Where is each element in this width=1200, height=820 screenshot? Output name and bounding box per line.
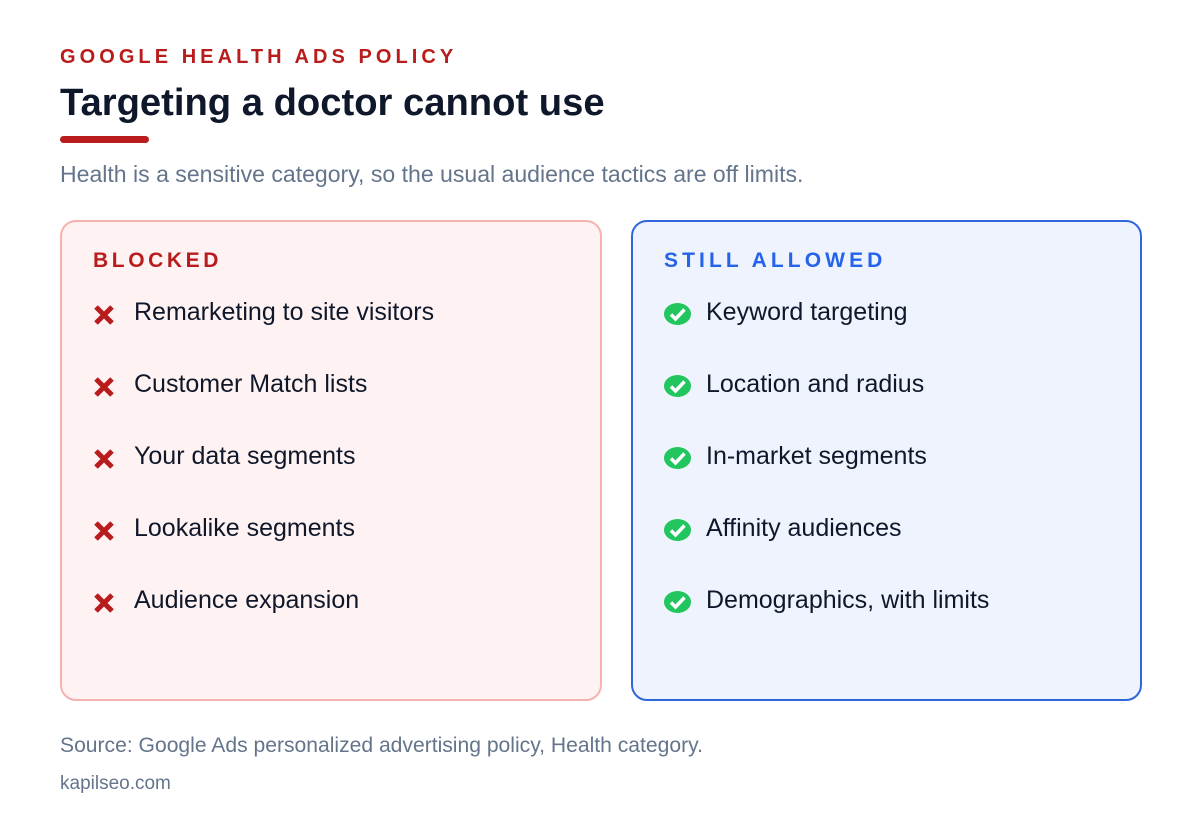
icon: check (664, 303, 691, 325)
site credit: kapilseo.com (60, 773, 171, 794)
item: customer match: Customer Match lists (134, 370, 367, 398)
item: remarketing: Remarketing to site visitors (134, 298, 434, 326)
item: lookalike: Lookalike segments (134, 514, 355, 542)
item: keyword: Keyword targeting (706, 298, 908, 326)
icon: cross (94, 449, 114, 469)
item: demographics: Demographics, with limits (706, 586, 989, 614)
eyebrow: GOOGLE HEALTH ADS POLICY (60, 46, 457, 68)
icon: check (664, 375, 691, 397)
item: data segments: Your data segments (134, 442, 355, 470)
subtitle: Health is a sensitive category, so the usual audience tactics are off limits. (60, 161, 803, 187)
icon: check (664, 519, 691, 541)
source note: Source: Google Ads personalized advertising policy, Health category. (60, 734, 703, 757)
item: location: Location and radius (706, 370, 924, 398)
icon: check (664, 591, 691, 613)
item: affinity: Affinity audiences (706, 514, 902, 542)
icon: cross (94, 593, 114, 613)
item: audience expansion: Audience expansion (134, 586, 359, 614)
title: Targeting a doctor cannot use (60, 81, 605, 124)
title accent bar (60, 136, 149, 143)
panel: blocked (60, 220, 602, 701)
icon: check (664, 447, 691, 469)
heading: blocked: BLOCKED (93, 249, 222, 272)
item: in-market: In-market segments (706, 442, 927, 470)
icon: cross (94, 305, 114, 325)
icon: cross (94, 521, 114, 541)
panel: still allowed (631, 220, 1142, 701)
heading: still allowed: STILL ALLOWED (664, 249, 886, 272)
icon: cross (94, 377, 114, 397)
